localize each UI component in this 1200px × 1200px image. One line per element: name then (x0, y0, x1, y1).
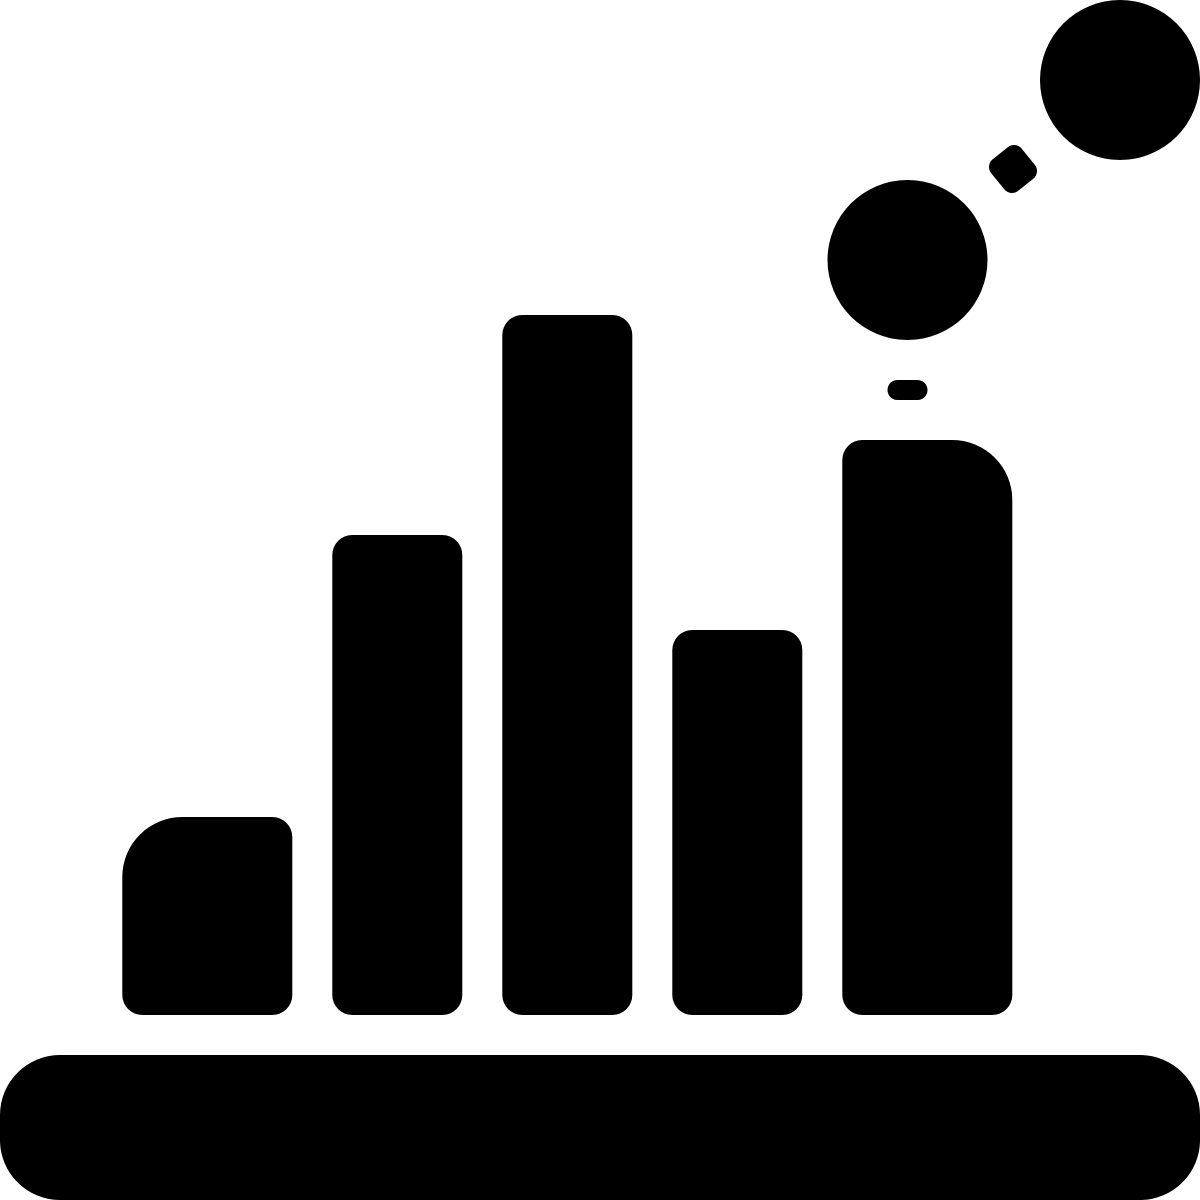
base platform (0, 1055, 1200, 1200)
trend dot: lower circle (828, 180, 988, 340)
bar 5 (842, 440, 1012, 1015)
bar 3 (502, 315, 632, 1015)
bar 2 (332, 535, 462, 1015)
trend connector: diamond (999, 155, 1027, 183)
bar 1 (122, 817, 292, 1015)
trend dot: upper circle (1040, 0, 1200, 160)
trend connector: short dash (888, 380, 928, 400)
bar 4 (672, 630, 802, 1015)
